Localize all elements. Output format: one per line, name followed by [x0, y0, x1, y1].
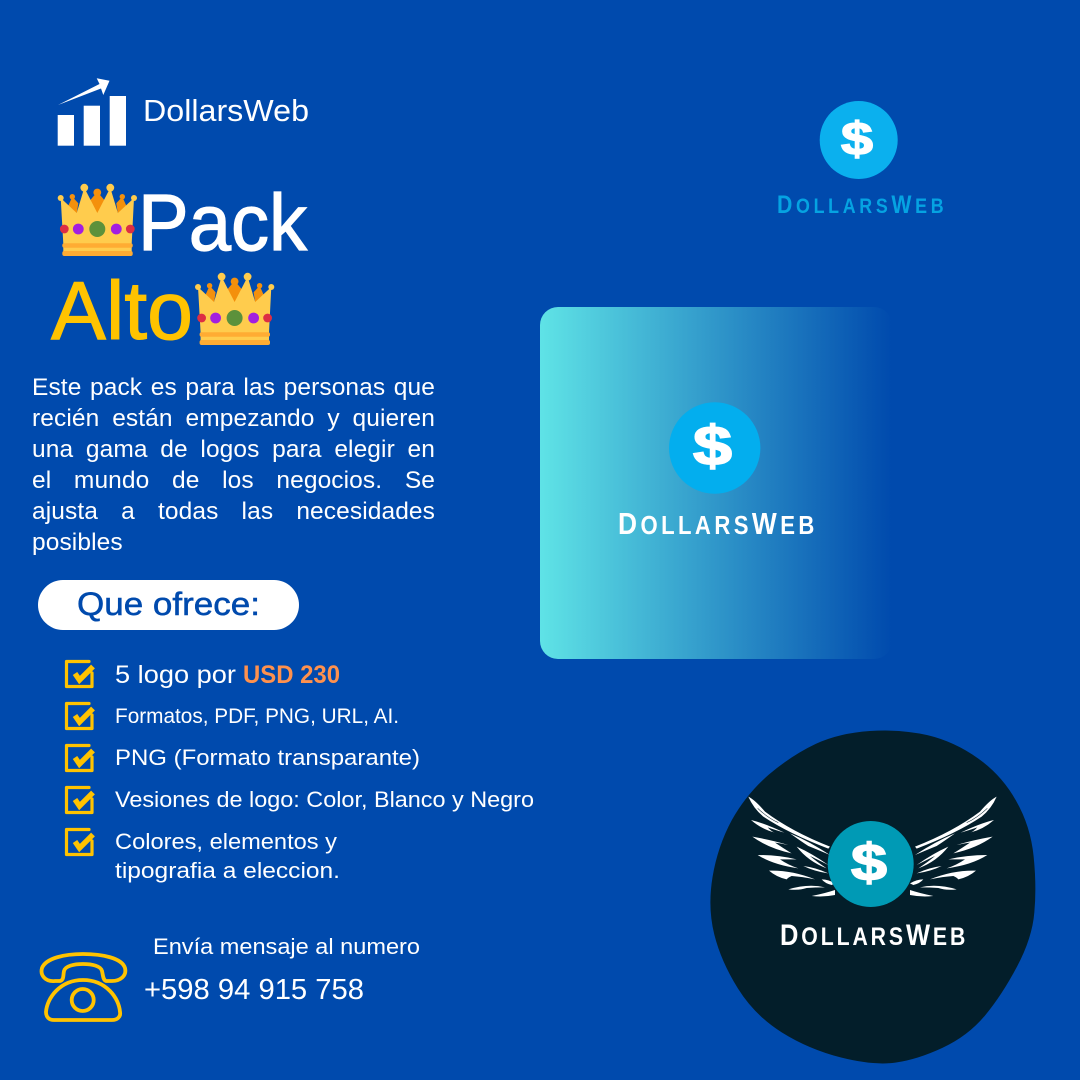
- icon: check 3: [66, 746, 93, 770]
- panel: dark blob logo with wings: [710, 731, 1035, 1063]
- icon: check 5: [66, 830, 93, 854]
- panel: dark blob logo with wings: DOLLARSWEB: [780, 918, 965, 951]
- logo: top DollarsWeb blue: [777, 101, 944, 218]
- panel: gradient logo card: DOLLARSWEB: [618, 507, 814, 542]
- logo: top DollarsWeb blue: $: [841, 112, 873, 164]
- text block: description: [32, 374, 435, 556]
- item 5: Colores, elementos y: [115, 829, 338, 854]
- text block: description: recién están empezando y quieren: [32, 404, 435, 432]
- icon: check 4: [66, 788, 93, 812]
- logo: top DollarsWeb blue: DOLLARSWEB: [777, 190, 944, 218]
- text block: description: posibles: [32, 528, 123, 556]
- text block: description: Este pack es para las personas que: [32, 374, 435, 400]
- pill: Que ofrece: [38, 580, 299, 630]
- item 1 price: 5 logo por: [115, 661, 236, 689]
- text block: description: una gama de logos para elegir en: [32, 436, 435, 462]
- panel: gradient logo card: [540, 307, 892, 659]
- panel: dark blob logo with wings: $: [851, 834, 887, 892]
- pill: Que ofrece: Que ofrece:: [77, 586, 260, 622]
- item 5: tipografia a eleccion.: [115, 858, 340, 883]
- item 2: Formatos, PDF, PNG, URL, AI.: [115, 704, 399, 728]
- icon: check 1: [66, 662, 93, 686]
- title: Pack: Pack: [138, 178, 308, 267]
- brand name: DollarsWeb: [143, 93, 309, 128]
- text block: description: el mundo de los negocios. Se: [32, 466, 435, 494]
- icon: bar chart logo with arrow: [58, 78, 126, 146]
- text block: description: ajusta a todas las necesidades: [32, 498, 435, 524]
- panel: gradient logo card: $: [693, 414, 732, 477]
- phone number: +598 94 915 758: [144, 974, 364, 1006]
- icon: crown right of Alto: [195, 273, 274, 345]
- item 1 price: USD 230: [243, 661, 340, 689]
- icon: check 2: [66, 704, 93, 728]
- title: Alto: Alto: [51, 264, 193, 357]
- item 3: PNG (Formato transparante): [115, 745, 420, 770]
- icon: crown left of Pack: [58, 184, 137, 256]
- checklist: offer items: [66, 661, 534, 883]
- item 5: [115, 829, 340, 883]
- item 4: Vesiones de logo: Color, Blanco y Negro: [115, 787, 534, 812]
- contact label: Envía mensaje al numero: [153, 934, 420, 959]
- icon: telephone: [42, 954, 125, 1020]
